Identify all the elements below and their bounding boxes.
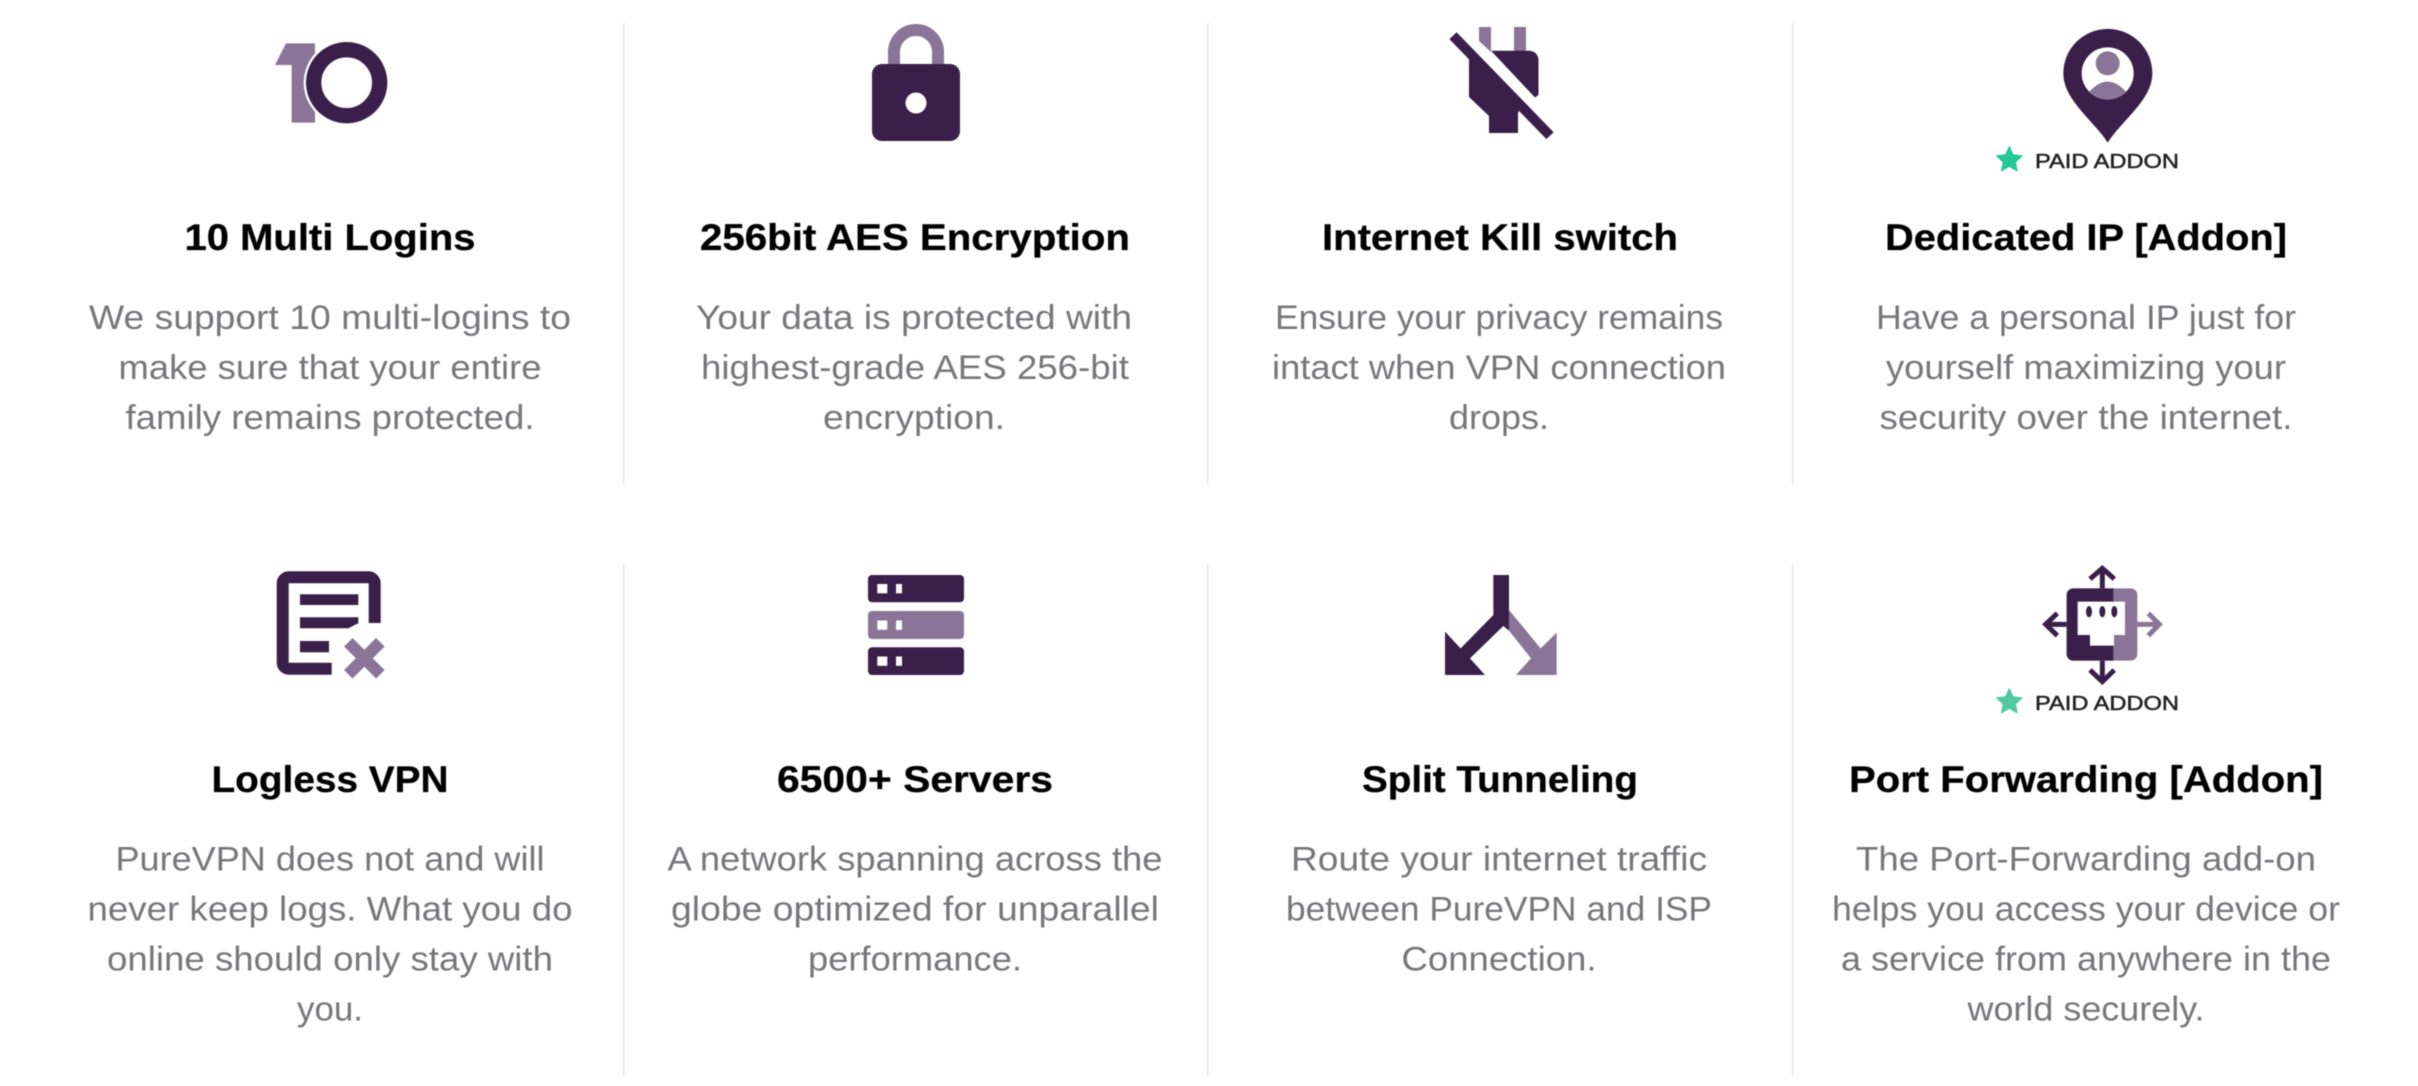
description: highest-grade AES 256-bit [701, 349, 1130, 387]
description: security over the internet. [1880, 399, 2292, 437]
description: between PureVPN and ISP [1286, 890, 1712, 928]
description [1286, 840, 1712, 978]
description: family remains protected. [126, 399, 534, 437]
description [1832, 840, 2340, 1028]
paid addon badge [1996, 146, 2179, 173]
description: online should only stay with [107, 940, 553, 978]
description: Route your internet traffic [1291, 840, 1707, 878]
heading: Internet Kill switch [1322, 217, 1678, 258]
panel: Internet Kill switch [1272, 27, 1726, 437]
description: Connection. [1402, 940, 1596, 978]
description: The Port-Forwarding add-on [1856, 840, 2316, 878]
paid addon badge: PAID ADDON [2035, 692, 2179, 715]
heading: 256bit AES Encryption [700, 217, 1130, 258]
description: make sure that your entire [118, 349, 542, 387]
panel: 10 Multi Logins [89, 40, 571, 437]
icon: location pin with person [2063, 29, 2152, 143]
description: PureVPN does not and will [116, 840, 544, 878]
description: Ensure your privacy remains [1275, 299, 1723, 337]
panel: Port Forwarding [1832, 568, 2340, 1028]
panel: 6500+ Servers [668, 575, 1162, 978]
panel: Dedicated IP [1876, 29, 2296, 437]
description [89, 299, 571, 437]
description [1272, 299, 1726, 437]
icon: network port with arrows [2046, 568, 2159, 682]
icon: number ten [275, 40, 390, 126]
heading: 6500+ Servers [777, 759, 1053, 800]
paid addon badge [1996, 688, 2179, 715]
description: never keep logs. What you do [88, 890, 572, 928]
description [696, 299, 1132, 437]
icon: split arrows [1445, 575, 1557, 675]
description: a service from anywhere in the [1841, 940, 2331, 978]
panel: Logless VPN [88, 577, 572, 1028]
description: intact when VPN connection [1272, 349, 1726, 387]
description: encryption. [823, 399, 1005, 437]
panel: 256bit AES Encryption [696, 30, 1132, 437]
icon: server stack [868, 575, 964, 675]
icon: crossed plug [1453, 27, 1550, 136]
description: Have a personal IP just for [1876, 299, 2296, 337]
description: A network spanning across the [668, 840, 1162, 878]
description: Your data is protected with [696, 299, 1132, 337]
description: helps you access your device or [1832, 890, 2340, 928]
paid addon badge: PAID ADDON [2035, 150, 2179, 173]
description: performance. [808, 940, 1022, 978]
description [668, 840, 1162, 978]
heading: 10 Multi Logins [184, 217, 476, 258]
icon: padlock [872, 30, 960, 141]
description: world securely. [1966, 990, 2204, 1028]
description [1876, 299, 2296, 437]
heading: Dedicated IP [Addon] [1885, 217, 2287, 258]
description: drops. [1449, 399, 1549, 437]
heading: Split Tunneling [1362, 759, 1638, 800]
description: yourself maximizing your [1886, 349, 2286, 387]
heading: Logless VPN [212, 759, 448, 800]
description: globe optimized for unparallel [671, 890, 1159, 928]
description [88, 840, 572, 1028]
icon: document with cross [283, 577, 380, 674]
description: We support 10 multi-logins to [89, 299, 571, 337]
heading: Port Forwarding [Addon] [1849, 759, 2323, 800]
panel: Split Tunneling [1286, 575, 1712, 978]
description: you. [297, 990, 363, 1028]
